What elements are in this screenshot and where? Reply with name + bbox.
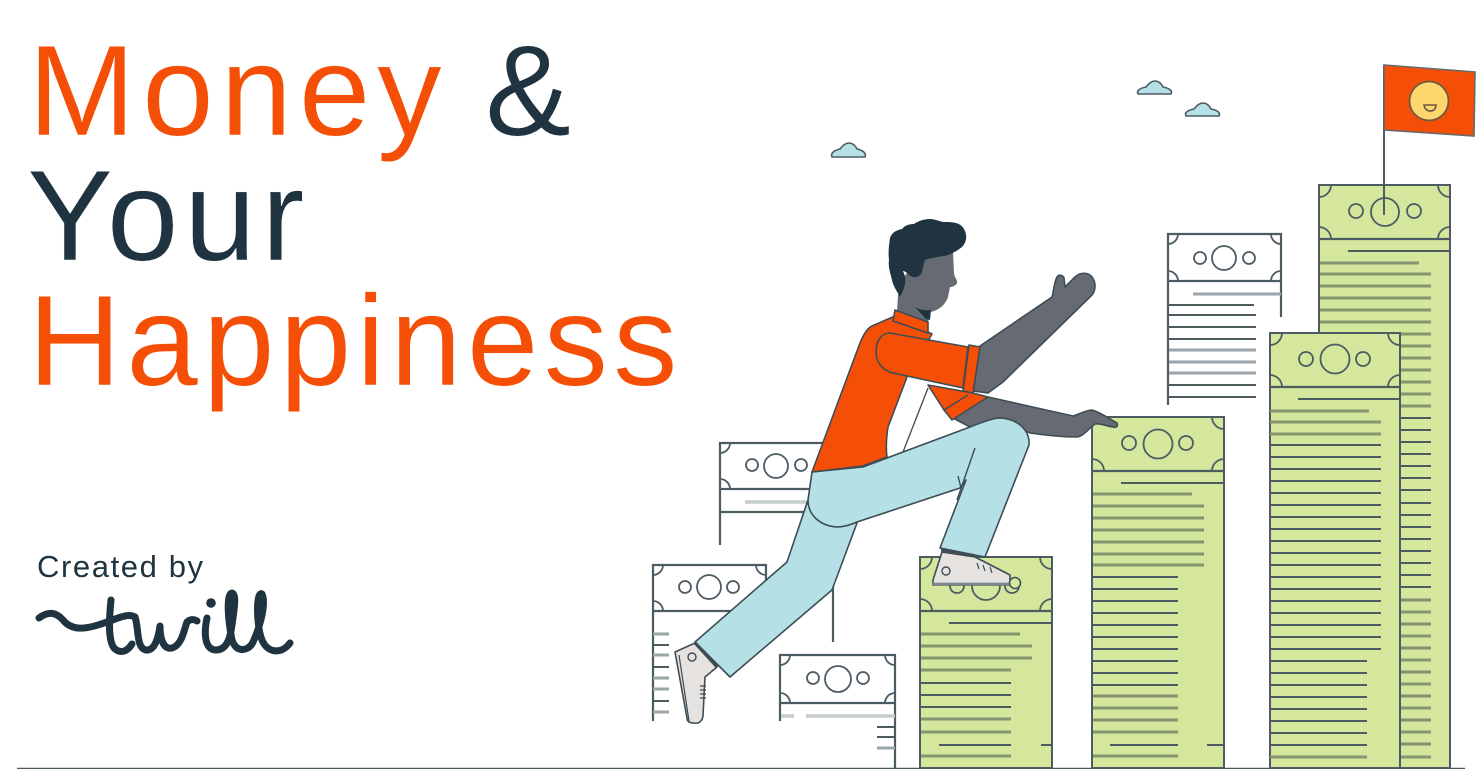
credit: created by twill (37, 549, 290, 651)
raised arm (973, 273, 1095, 393)
clouds (832, 81, 1219, 157)
cloud 3 (832, 143, 865, 157)
flag cloth (1384, 65, 1475, 136)
flag pole (1383, 65, 1385, 215)
cloud 1 (1138, 81, 1171, 94)
white money bill: bottom centre (780, 655, 895, 769)
hair (889, 219, 966, 297)
white money stack: top centre (1168, 234, 1281, 405)
title: Money & Your Happiness: Money (28, 19, 448, 163)
smiley face (1410, 82, 1448, 120)
title: Money & Your Happiness: Happiness (28, 269, 683, 413)
green money stack: front right (1270, 333, 1400, 768)
cloud 2 (1186, 103, 1219, 116)
back shoe (675, 643, 717, 723)
character: running man (675, 219, 1117, 723)
green money stack: middle (1092, 417, 1224, 768)
bottom rule (17, 768, 1465, 769)
green money stack: tallest, back right (1319, 185, 1450, 768)
logo: twill wordmark drawing (39, 593, 290, 651)
shirt lower sleeve (928, 385, 988, 420)
upper cuff (963, 345, 980, 393)
white money bill: behind runner, upper (720, 443, 833, 642)
white money bill: behind runner, left (653, 565, 766, 721)
title: Money & Your Happiness: Your (27, 144, 310, 288)
flag with smiley (1384, 65, 1475, 215)
shirt inner line (903, 388, 928, 452)
back leg (695, 500, 857, 677)
collar (893, 310, 928, 333)
shirt body (812, 316, 932, 472)
title: Money & Your Happiness (27, 19, 683, 413)
trouser crease (957, 448, 975, 500)
neck shadow (915, 307, 931, 320)
front thigh and shin (808, 418, 1029, 557)
upper sleeve (876, 333, 968, 388)
credit text: Created by (37, 549, 205, 584)
title: Money & Your Happiness: & (485, 19, 576, 163)
green money stack: under front foot (920, 557, 1052, 768)
lower arm (953, 397, 1117, 437)
lower cuff line (944, 395, 968, 410)
front shoe (933, 550, 1020, 588)
neck and head (897, 252, 957, 322)
